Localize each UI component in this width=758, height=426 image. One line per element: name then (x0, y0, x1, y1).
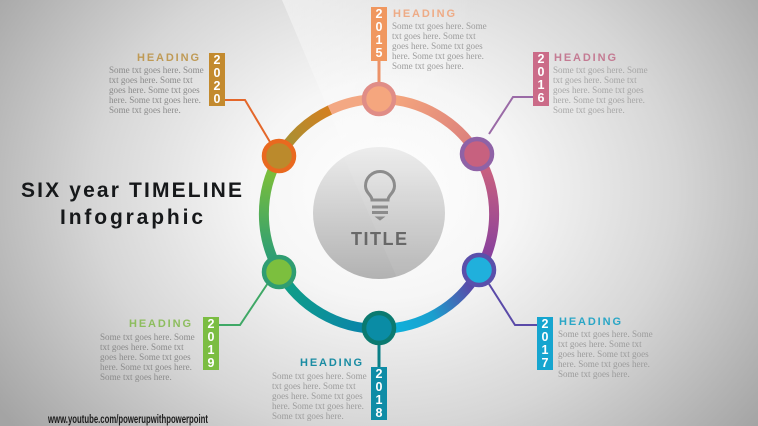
item 2018: 1 (376, 393, 383, 407)
item 2019: goes here. Some txt goes (100, 352, 191, 362)
item 2016: 6 (538, 91, 545, 105)
item 2019: 1 (208, 343, 215, 357)
item 2020: here. Some txt goes here. (109, 95, 201, 105)
item 2019: HEADING (129, 318, 191, 330)
item 2015: here. Some txt goes here. (392, 51, 484, 61)
item 2019: 0 (208, 330, 215, 344)
item 2016: here. Some txt goes here. (553, 95, 645, 105)
item 2018: 0 (376, 380, 383, 394)
item 2019: txt goes here. Some txt (100, 342, 184, 352)
item 2017: goes here. Some txt goes (558, 349, 649, 359)
item 2015: Some txt goes here. Some (392, 21, 487, 31)
item 2019: Some txt goes here. (100, 372, 172, 382)
item 2016: 2 (538, 52, 545, 66)
item 2020 (109, 52, 225, 115)
item 2017 (537, 316, 653, 379)
item 2020: 2 (214, 53, 221, 67)
item 2016: 0 (538, 65, 545, 79)
item 2020: Some txt goes here. (109, 105, 181, 115)
item 2015: HEADING (393, 8, 455, 20)
main title: Infographic (60, 206, 203, 229)
item 2015: 5 (376, 46, 383, 60)
item 2015: 2 (376, 7, 383, 21)
item 2016: 1 (538, 78, 545, 92)
item 2017: 1 (542, 343, 549, 357)
item 2017: Some txt goes here. Some (558, 329, 653, 339)
item 2019: Some txt goes here. Some (100, 332, 195, 342)
item 2017: txt goes here. Some txt (558, 339, 642, 349)
item 2015 (371, 7, 487, 71)
item 2018: goes here. Some txt goes (272, 391, 363, 401)
footer url: www.youtube.com/powerupwithpowerpoint (47, 412, 208, 426)
item 2018: 8 (376, 406, 383, 420)
center disc (313, 147, 445, 279)
item 2016: txt goes here. Some txt (553, 75, 637, 85)
item 2017: 7 (542, 356, 549, 370)
item 2018: txt goes here. Some txt (272, 381, 356, 391)
item 2019: 2 (208, 317, 215, 331)
item 2020: Some txt goes here. Some (109, 65, 204, 75)
item 2018 (272, 357, 387, 421)
item 2015: 0 (376, 20, 383, 34)
item 2017: Some txt goes here. (558, 369, 630, 379)
item 2020: 0 (214, 66, 221, 80)
item 2020: 0 (214, 92, 221, 106)
disc title: TITLE (351, 229, 407, 249)
item 2018: here. Some txt goes here. (272, 401, 364, 411)
item 2018: HEADING (300, 357, 362, 369)
item 2018: 2 (376, 367, 383, 381)
item 2018: Some txt goes here. Some (272, 371, 367, 381)
item 2015: txt goes here. Some txt (392, 31, 476, 41)
connector lines (219, 60, 549, 368)
item 2018: Some txt goes here. (272, 411, 344, 421)
timeline ring (264, 99, 494, 329)
item 2020: 2 (214, 79, 221, 93)
item 2020: goes here. Some txt goes (109, 85, 200, 95)
item 2017: 0 (542, 330, 549, 344)
item 2020: HEADING (137, 52, 199, 64)
item 2019 (100, 317, 219, 382)
main title (21, 179, 242, 229)
item 2019: 9 (208, 356, 215, 370)
item 2015: goes here. Some txt goes (392, 41, 483, 51)
item 2020: txt goes here. Some txt (109, 75, 193, 85)
icon: light bulb (366, 172, 394, 220)
item 2016 (533, 52, 648, 115)
item 2016: Some txt goes here. (553, 105, 625, 115)
item 2017: here. Some txt goes here. (558, 359, 650, 369)
item 2016: goes here. Some txt goes (553, 85, 644, 95)
item 2016: Some txt goes here. Some (553, 65, 648, 75)
main title: SIX year TIMELINE (21, 179, 242, 202)
item 2015: Some txt goes here. (392, 61, 464, 71)
item 2016: HEADING (554, 52, 616, 64)
item 2015: 1 (376, 33, 383, 47)
item 2017: HEADING (559, 316, 621, 328)
item 2017: 2 (542, 317, 549, 331)
timeline nodes (264, 84, 494, 343)
item 2019: here. Some txt goes here. (100, 362, 192, 372)
